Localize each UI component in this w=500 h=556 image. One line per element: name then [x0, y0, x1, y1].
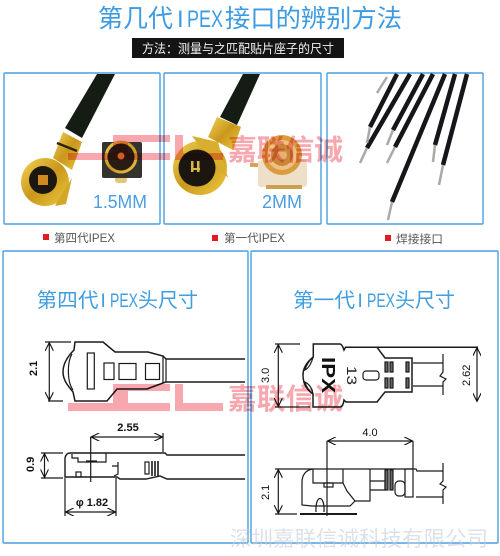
heading: first generation size: I — [358, 291, 363, 312]
panel: soldered wires photo — [327, 73, 483, 224]
dimension: 2.1: 2.1 — [28, 361, 40, 376]
subtitle banner — [132, 38, 344, 58]
panel: fourth generation dimensions — [3, 251, 248, 543]
caption: soldered connector: 焊接接口 — [396, 232, 443, 246]
heading: fourth generation size — [36, 289, 198, 312]
title: PEX — [187, 6, 223, 33]
heading: fourth generation size: PEX — [110, 291, 138, 312]
heading: fourth generation size: 第四代 — [36, 289, 98, 312]
dimension: 2.55: 2.55 — [117, 422, 139, 434]
diagram: fourth generation side view — [41, 433, 245, 516]
diagram: first generation side view — [275, 441, 446, 516]
dimension: 0.9: 0.9 — [25, 457, 37, 472]
subtitle banner: 方法：测量与之匹配贴片座子的尺寸 — [142, 41, 334, 56]
icon: first generation cable and connector — [173, 74, 307, 195]
title: 第几代 — [98, 5, 173, 33]
dimension: diameter 1.82: φ 1.82 — [76, 497, 108, 509]
icon: 2mm socket — [250, 135, 307, 189]
title: I — [177, 6, 184, 33]
watermark: upper JCL — [68, 134, 343, 167]
dimension: 2.1: 2.1 — [260, 485, 272, 500]
heading: first generation size: 头尺寸 — [395, 289, 455, 312]
watermark: company name: 深圳嘉联信诚科技有限公司 — [230, 528, 488, 551]
caption: soldered connector — [385, 232, 443, 246]
dimension: 2.62: 2.62 — [461, 365, 473, 386]
heading: first generation size — [293, 289, 455, 312]
label: 1.5MM: 1.5MM — [93, 192, 147, 212]
icon: wire bundle — [360, 74, 467, 220]
heading: first generation size: PEX — [367, 291, 395, 312]
watermark: lower JCL — [68, 383, 343, 416]
diagram: fourth generation top view — [45, 342, 245, 401]
heading: fourth generation size: 头尺寸 — [138, 289, 198, 312]
dimension: 4.0: 4.0 — [362, 427, 378, 439]
label: IPX marking: IPX — [318, 357, 338, 393]
panel: first generation dimensions — [251, 251, 498, 543]
title — [98, 5, 402, 33]
title: 接口的辨别方法 — [225, 5, 402, 33]
dimension: 3.0: 3.0 — [260, 368, 272, 383]
heading: first generation size: 第一代 — [293, 289, 355, 312]
label: 13 marking: 13 — [344, 366, 360, 385]
caption: fourth generation: 第四代IPEX — [54, 231, 115, 245]
heading: fourth generation size: I — [100, 291, 106, 312]
panel: fourth generation photo — [4, 73, 160, 224]
diagram: first generation top view — [275, 344, 478, 407]
watermark: lower JCL: 嘉联信诚 — [228, 383, 343, 416]
icon: fourth generation cable and connector — [21, 74, 142, 206]
watermark: upper JCL: 嘉联信诚 — [228, 134, 343, 167]
icon: 1.5mm socket — [102, 140, 142, 183]
caption: first generation: 第一代IPEX — [224, 231, 285, 245]
panel: first generation photo — [164, 73, 321, 224]
label: 2MM: 2MM — [262, 192, 302, 212]
